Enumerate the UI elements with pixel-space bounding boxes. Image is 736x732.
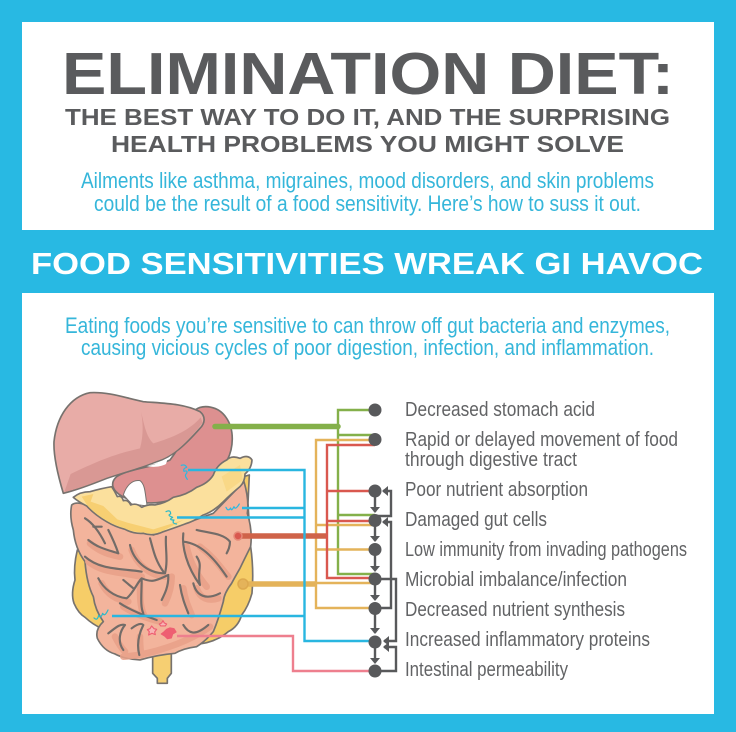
effects list: Damaged gut cells [405, 509, 547, 531]
section intro text: causing vicious cycles of poor digestion, infection, and inflammation. [81, 335, 654, 360]
green connectors [215, 410, 375, 574]
intestine shading [88, 543, 228, 657]
panel: header [22, 22, 714, 230]
liver stomach gap [147, 455, 169, 467]
intestine folds [85, 518, 230, 655]
return arrows [375, 491, 396, 671]
subtitle [65, 104, 670, 157]
digestive system illustration [54, 393, 253, 683]
bacteria squiggles [94, 465, 239, 619]
blue connectors [112, 470, 375, 641]
large intestine sides [73, 475, 253, 644]
section heading: FOOD SENSITIVITIES WREAK GI HAVOC [31, 246, 703, 281]
effects list: Poor nutrient absorption [405, 479, 588, 501]
feedback arrows [370, 486, 396, 671]
subtitle: THE BEST WAY TO DO IT, AND THE SURPRISING [65, 104, 670, 130]
effects list: through digestive tract [405, 449, 577, 471]
node dots [368, 404, 382, 678]
effects list: Increased inflammatory proteins [405, 629, 650, 651]
stomach [113, 407, 232, 503]
small intestine [71, 482, 251, 660]
effects list: Decreased stomach acid [405, 399, 595, 421]
effects list: Decreased nutrient synthesis [405, 599, 625, 621]
title: ELIMINATION DIET: [62, 41, 674, 107]
effects list: Intestinal permeability [405, 659, 568, 681]
colored connector lines [112, 410, 375, 671]
section intro text [65, 313, 670, 360]
intro text: Ailments like asthma, migraines, mood disorders, and skin problems [81, 168, 654, 193]
intro text: could be the result of a food sensitivity. Here’s how to suss it out. [94, 191, 641, 216]
pink connector [177, 636, 375, 671]
stomach opening [123, 480, 147, 506]
effects list: Rapid or delayed movement of food [405, 429, 678, 451]
subtitle: HEALTH PROBLEMS YOU MIGHT SOLVE [111, 131, 624, 157]
liver shadow [64, 412, 203, 492]
rectum [153, 653, 171, 683]
inflammation marks [147, 621, 176, 639]
intro text [81, 168, 654, 216]
transverse colon [73, 457, 252, 535]
vertical arrows [370, 491, 380, 664]
liver [54, 393, 204, 493]
orange connectors [238, 440, 375, 608]
effects list [405, 399, 687, 681]
panel: diagram [22, 293, 714, 714]
colon shading [82, 465, 243, 533]
effects list: Microbial imbalance/infection [405, 569, 627, 591]
red connectors [234, 445, 375, 578]
